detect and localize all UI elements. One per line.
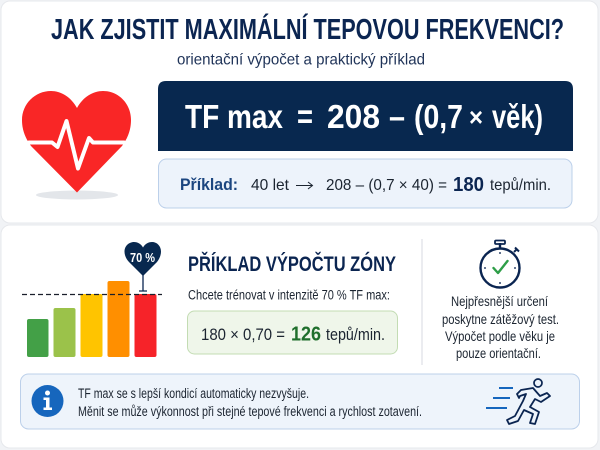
info box xyxy=(20,374,580,429)
unit: tepů/min. xyxy=(326,325,385,344)
formula banner xyxy=(158,81,573,151)
subtitle: orientační výpočet a praktický příklad xyxy=(177,52,425,68)
info text xyxy=(78,386,422,419)
note text: Nejpřesnější určení xyxy=(451,293,548,309)
note text xyxy=(442,293,559,361)
heading: PŘÍKLAD VÝPOČTU ZÓNY xyxy=(188,252,396,276)
icon: stopwatch xyxy=(480,240,520,288)
formula banner: = xyxy=(297,98,313,135)
panel: top formula xyxy=(1,1,598,223)
icon: runner xyxy=(486,379,550,424)
bar chart xyxy=(22,281,162,357)
icon: 70 percent heart marker: 70 % xyxy=(130,250,155,265)
formula banner: TF max xyxy=(185,98,284,135)
formula banner: (0,7 xyxy=(414,98,463,135)
formula banner: – xyxy=(389,98,405,135)
info text: TF max se s lepší kondicí automaticky nezvyšuje. xyxy=(78,386,309,401)
example label: Příklad: xyxy=(180,176,238,194)
icon: 70 percent heart marker xyxy=(124,242,161,291)
formula banner: 208 xyxy=(327,98,380,135)
example unit: tepů/min. xyxy=(490,176,551,194)
intro text: Chcete trénovat v intenzitě 70 % TF max: xyxy=(188,288,390,302)
note text: pouze orientační. xyxy=(456,345,541,361)
icon: info xyxy=(32,385,64,417)
result: 126 xyxy=(291,324,321,346)
note text: poskytne zátěžový test. xyxy=(442,311,559,327)
arrow xyxy=(296,182,312,189)
note text: Výpočet podle věku je xyxy=(445,328,555,344)
panel: zone example xyxy=(1,225,598,448)
example result: 180 xyxy=(453,174,484,196)
example age: 40 let xyxy=(251,177,290,194)
formula banner: × xyxy=(469,102,483,132)
calculation: 180 × 0,70 = xyxy=(201,325,285,344)
result box xyxy=(188,311,398,354)
info text: Měnit se může výkonnost při stejné tepové frekvenci a rychlost zotavení. xyxy=(78,404,422,419)
icon: heart with pulse xyxy=(22,91,131,200)
example calculation: 208 – (0,7 × 40) = xyxy=(326,177,447,194)
formula banner: věk) xyxy=(492,98,543,135)
example box xyxy=(158,159,572,208)
